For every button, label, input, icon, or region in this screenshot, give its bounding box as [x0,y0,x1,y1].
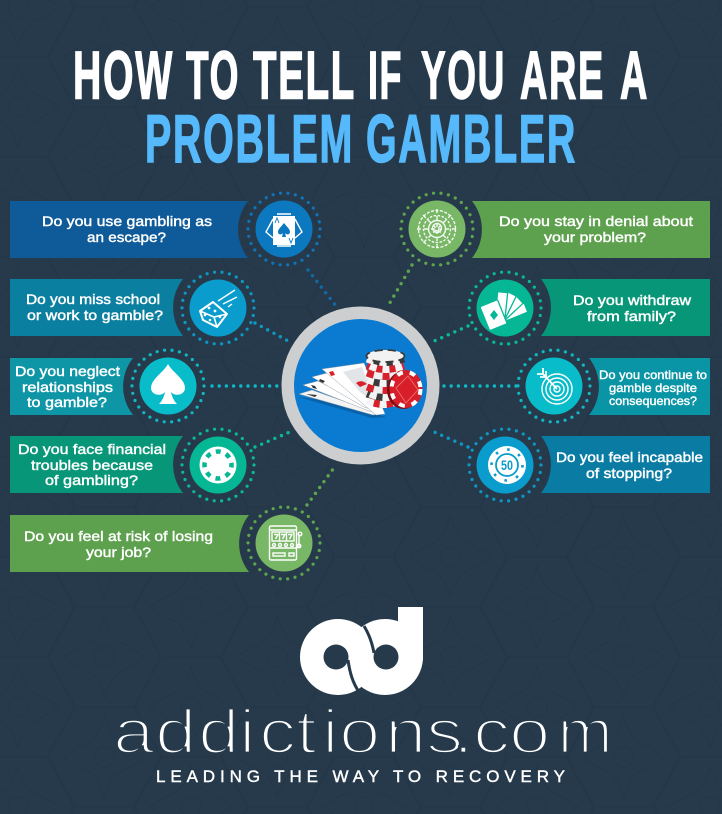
panel: denial question [401,193,710,265]
panel: consequences question: Do you continue to [599,368,707,382]
icon: 50 chip: 50 [501,457,513,473]
tagline: LEADING THE WAY TO RECOVERY [156,767,565,786]
panel: school or work question: Do you miss school [26,292,160,307]
icon: slot machine [270,526,302,560]
panel: relationships question [10,350,204,422]
logo: wordmark: m [558,697,613,767]
icon: card fan [480,292,528,331]
panel: family question [469,272,710,344]
panel: escape question: Do you use gambling as [42,214,212,229]
panel: financial troubles question: of gambling? [45,473,138,488]
icon: fanned cards [298,363,386,418]
title: TO [186,37,240,113]
panel: financial troubles question [10,429,254,501]
title: GAMBLER [366,101,577,177]
icon: chip stack [366,350,404,404]
title: YOU [421,37,506,113]
central badge: cards and chips [282,306,440,464]
panel: consequences question [518,350,710,422]
panel: family question: from family? [587,309,676,324]
panel: consequences question: gamble despite [609,381,697,395]
logo: ad mark [300,607,423,695]
title: TELL [253,37,356,113]
panel: escape question [10,193,320,265]
panel: escape question: an escape? [87,230,166,245]
panel: losing job question: Do you feel at risk of losing [24,529,213,544]
panel: school or work question [10,272,254,344]
panel: stopping question: of stopping? [586,466,672,481]
title [73,37,649,177]
title: IF [368,37,403,113]
panel: denial question: Do you stay in denial about [499,214,693,229]
panel: relationships question: to gamble? [27,395,107,410]
icon: red chip [387,370,422,409]
panel: relationships question: relationships [22,380,113,395]
icon: rolling dice [200,290,237,327]
panel: losing job question [10,507,320,579]
panel: stopping question [469,429,710,501]
title: A [620,37,649,113]
title: ARE [520,37,605,113]
panel: financial troubles question: Do you face financial [18,442,166,457]
icon: target with arrow [537,368,572,404]
panel: losing job question: your job? [86,545,151,560]
title: HOW [73,37,174,113]
icon: mandala [417,209,457,249]
panel: relationships question: Do you neglect [15,364,120,379]
panel: denial question: your problem? [544,230,646,245]
connector dots [212,265,516,505]
panel: family question: Do you withdraw [573,293,691,308]
icon: spade [151,364,185,404]
icon: playing cards [266,214,302,246]
panel: consequences question: consequences? [609,394,697,408]
panel: school or work question: or work to gamble? [27,308,163,323]
panel: stopping question: Do you feel incapable [556,450,703,465]
panel: financial troubles question: troubles because [31,458,153,473]
logo: wordmark: addictions.co [113,697,550,767]
title: PROBLEM [145,101,354,177]
icon: poker chip [200,446,236,484]
icon: 50 chip [488,446,526,484]
